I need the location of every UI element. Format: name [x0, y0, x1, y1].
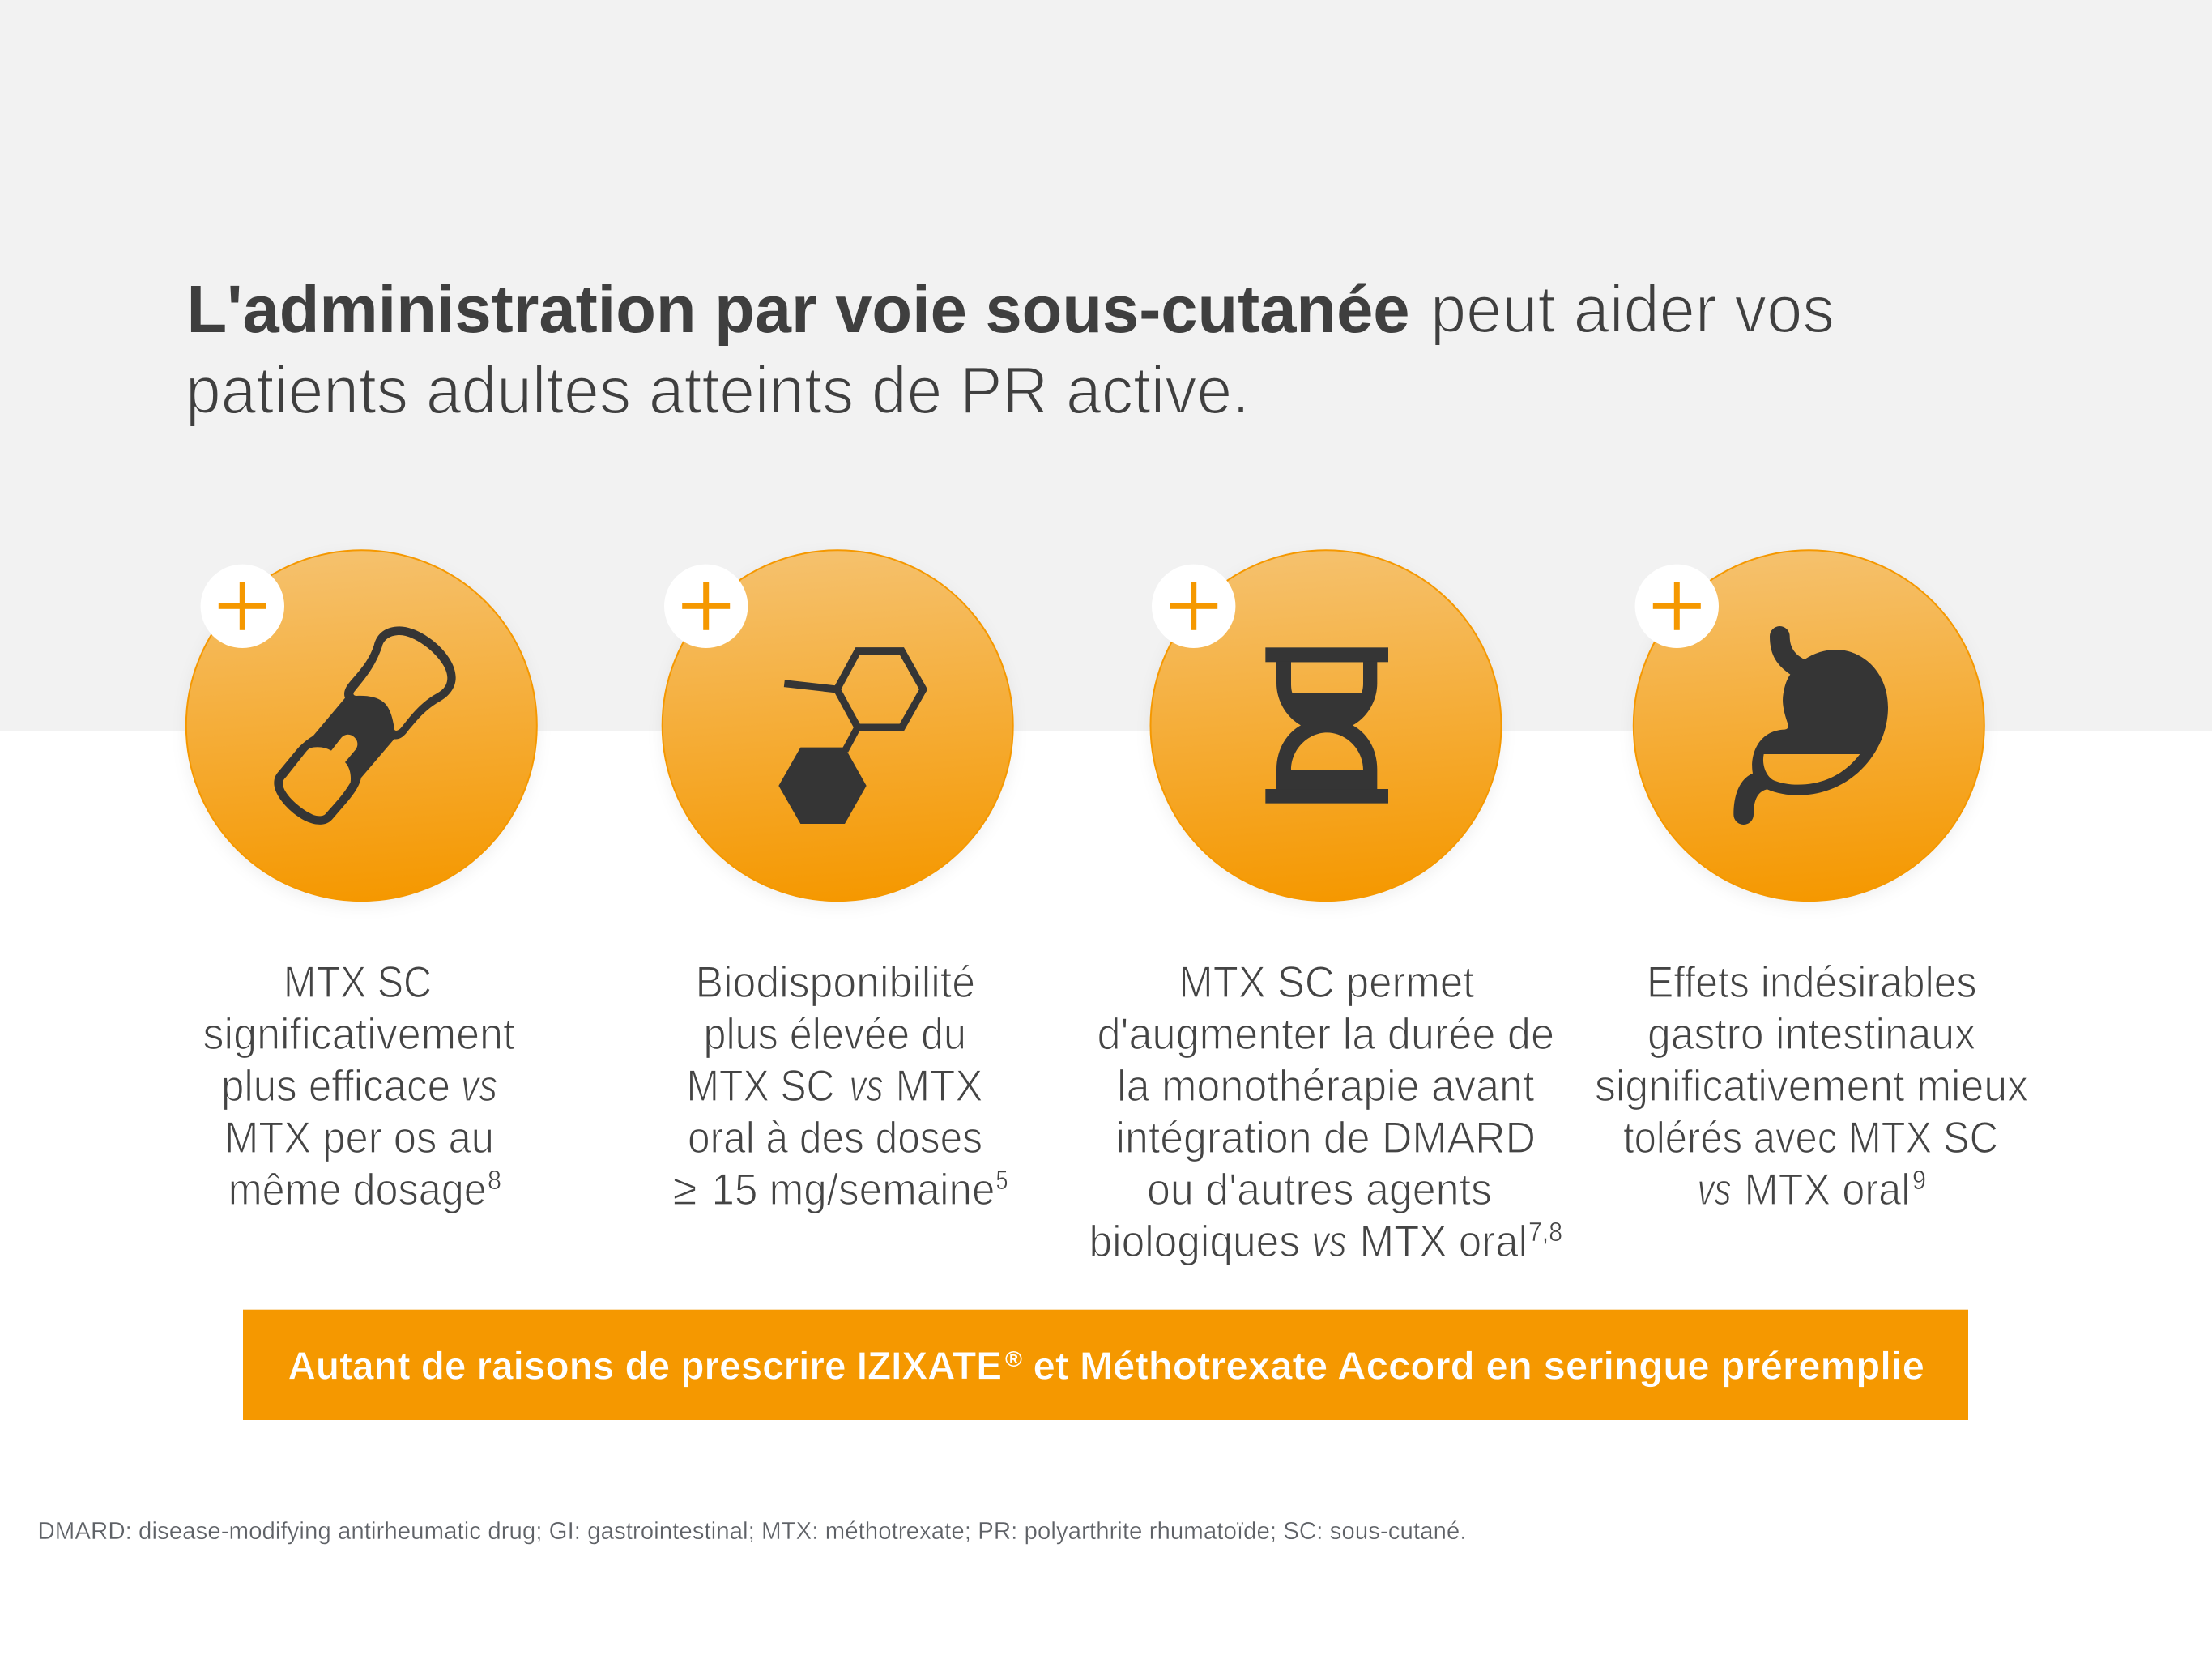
panel: bioavailability	[663, 550, 1013, 1214]
circle: GI tolerance	[1634, 550, 1984, 901]
text: GI tolerance: gastro intestinaux	[1647, 1009, 1975, 1059]
text: monotherapy duration: 7,8	[1528, 1217, 1562, 1247]
title	[185, 271, 1835, 428]
text: efficacy: 8	[488, 1165, 501, 1195]
text: GI tolerance: MTX oral	[1745, 1164, 1910, 1214]
circle: efficacy	[186, 550, 537, 901]
text: GI tolerance: tolérés avec MTX SC	[1623, 1112, 1998, 1162]
text: monotherapy duration: d'augmenter la durée de	[1097, 1009, 1554, 1059]
plus badge	[201, 565, 284, 648]
text: monotherapy duration: biologiques	[1089, 1216, 1300, 1266]
panel: efficacy	[186, 550, 537, 1214]
icon: syringe	[274, 626, 456, 825]
text: GI tolerance: 9	[1912, 1165, 1926, 1195]
text: bioavailability: MTX SC	[687, 1060, 834, 1111]
text: monotherapy duration: MTX oral	[1359, 1216, 1528, 1266]
title: L'administration par voie sous-cutanée	[186, 271, 1409, 347]
icon: stomach	[1733, 626, 1888, 825]
text: GI tolerance	[1595, 957, 2028, 1214]
circle: bioavailability	[663, 550, 1013, 901]
text: bioavailability: MTX	[896, 1060, 983, 1111]
panel: monotherapy duration	[1089, 550, 1562, 1266]
text: bioavailability: 15 mg/semaine	[711, 1164, 995, 1214]
plus badge	[664, 565, 748, 648]
grey header background	[0, 0, 2212, 731]
text: bioavailability: vs	[849, 1060, 883, 1111]
icon: molecule	[778, 651, 923, 824]
text: efficacy: significativement	[202, 1009, 515, 1059]
text: bioavailability	[672, 957, 1008, 1214]
text: efficacy: MTX SC	[283, 957, 432, 1007]
title: patients adultes atteints de PR active.	[185, 352, 1250, 428]
text: bioavailability: Biodisponibilité	[695, 957, 975, 1007]
text: efficacy: vs	[461, 1060, 497, 1111]
text: efficacy: même dosage	[228, 1164, 487, 1214]
plus badge	[1635, 565, 1719, 648]
callout banner: et Méthotrexate Accord en seringue préremplie	[1034, 1346, 1924, 1388]
callout banner	[243, 1310, 1968, 1420]
text: GI tolerance: Effets indésirables	[1647, 957, 1976, 1007]
text: monotherapy duration: la monothérapie avant	[1117, 1060, 1534, 1111]
icon: hourglass	[1265, 647, 1388, 804]
circle: monotherapy duration	[1150, 550, 1502, 901]
text: monotherapy duration: vs	[1312, 1216, 1346, 1266]
plus badge	[1152, 565, 1235, 648]
text: monotherapy duration: intégration de DMARD	[1116, 1112, 1536, 1162]
text: bioavailability: ≥	[672, 1164, 697, 1214]
callout banner: Autant de raisons de prescrire IZIXATE	[288, 1346, 1002, 1388]
text: monotherapy duration	[1089, 957, 1562, 1266]
text: efficacy	[202, 957, 515, 1214]
callout banner: ®	[1005, 1347, 1022, 1371]
text: bioavailability: plus élevée du	[703, 1009, 966, 1059]
text: efficacy: MTX per os au	[224, 1112, 494, 1162]
text: GI tolerance: vs	[1698, 1164, 1732, 1214]
text: monotherapy duration: ou d'autres agents	[1147, 1164, 1492, 1214]
title: peut aider vos	[1430, 271, 1835, 347]
text: bioavailability: oral à des doses	[688, 1112, 982, 1162]
text: efficacy: plus efficace	[221, 1060, 450, 1111]
text: monotherapy duration: MTX SC permet	[1178, 957, 1474, 1007]
text: bioavailability: 5	[996, 1165, 1008, 1195]
panel: GI tolerance	[1595, 550, 2028, 1214]
text: GI tolerance: significativement mieux	[1595, 1060, 2028, 1111]
footnote: DMARD: disease-modifying antirheumatic drug; GI: gastrointestinal; MTX: méthotrexate; PR: polyarthrite rhumatoïde; SC: sous-cutané.	[37, 1516, 1466, 1545]
